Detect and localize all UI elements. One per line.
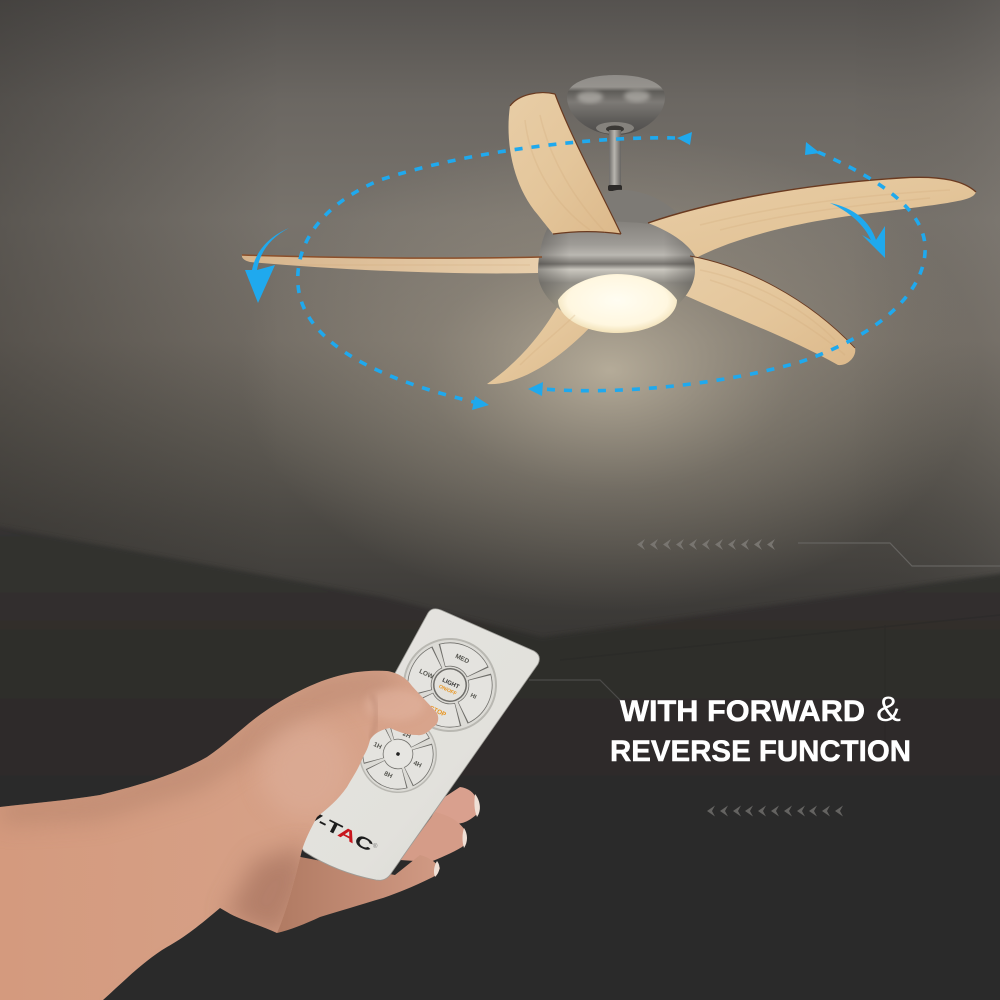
arrowhead top	[677, 132, 692, 145]
remote control	[301, 609, 539, 880]
headline line one: WITH FORWARD	[620, 695, 865, 728]
button label MED: MED	[454, 653, 470, 666]
motor side shading	[538, 222, 695, 333]
rotation arrows dashed orbit	[245, 132, 925, 410]
fingernail two	[462, 828, 467, 848]
arm silhouette	[0, 671, 438, 1000]
chevrons top row	[637, 539, 775, 550]
timer label 8H: 8H	[383, 770, 394, 780]
button label ON/OFF: ON/OFF	[438, 684, 457, 697]
arrowhead bottom	[528, 382, 543, 396]
fan down rod	[609, 130, 621, 187]
headline: with forward and reverse function	[610, 690, 911, 768]
button label LOW: LOW	[418, 668, 435, 681]
hand back with fingers behind remote	[277, 787, 480, 933]
curved blue arrow right	[830, 203, 885, 258]
callout line to remote	[529, 680, 622, 702]
blade: top	[508, 93, 621, 234]
V-TAC logo: V-T AC	[301, 806, 376, 856]
ceiling fan	[242, 75, 976, 384]
fingernail one	[474, 794, 480, 817]
button label STOP: STOP	[428, 705, 448, 719]
blade right top edge	[648, 177, 976, 223]
callout line top	[798, 543, 1000, 566]
headline line two: REVERSE FUNCTION	[610, 735, 911, 768]
timer button cluster	[346, 702, 450, 806]
blade: right	[648, 177, 976, 258]
finger three and lower palm	[277, 855, 440, 933]
blade lower right edge	[690, 256, 855, 348]
blade: lower left	[487, 306, 595, 384]
arrowhead bottom left	[472, 396, 489, 410]
hand arm and thumb in front of remote	[0, 668, 438, 1000]
fan upper motor dome	[590, 190, 690, 240]
blade top edges	[510, 93, 621, 234]
remote body	[302, 609, 539, 880]
button label HI: HI	[469, 693, 477, 701]
curved blue arrow left	[245, 228, 289, 303]
button label LIGHT: LIGHT	[441, 678, 460, 691]
chevrons bottom row	[707, 806, 843, 816]
fan rod nut	[608, 185, 622, 191]
lamp glass	[558, 274, 677, 333]
timer label 2H: 2H	[401, 730, 412, 740]
blade: lower right	[682, 256, 855, 365]
blade left top edge	[242, 255, 542, 258]
finger one	[425, 787, 479, 830]
timer label 1H: 1H	[372, 741, 383, 751]
registered mark: ®	[373, 843, 378, 850]
dashed orbit right arc	[542, 152, 925, 391]
finger two	[400, 812, 466, 862]
fingernail three	[434, 861, 439, 877]
ampersand: &	[876, 690, 901, 729]
fan ceiling canopy	[567, 75, 665, 135]
main button cluster	[388, 623, 512, 747]
motor body	[538, 222, 695, 333]
blade: left	[242, 255, 542, 273]
arrowhead top right	[805, 142, 820, 155]
hand shading	[3, 671, 421, 932]
timer label 4H: 4H	[412, 760, 423, 770]
dashed orbit left arc	[298, 138, 675, 402]
wood grain	[300, 115, 950, 365]
